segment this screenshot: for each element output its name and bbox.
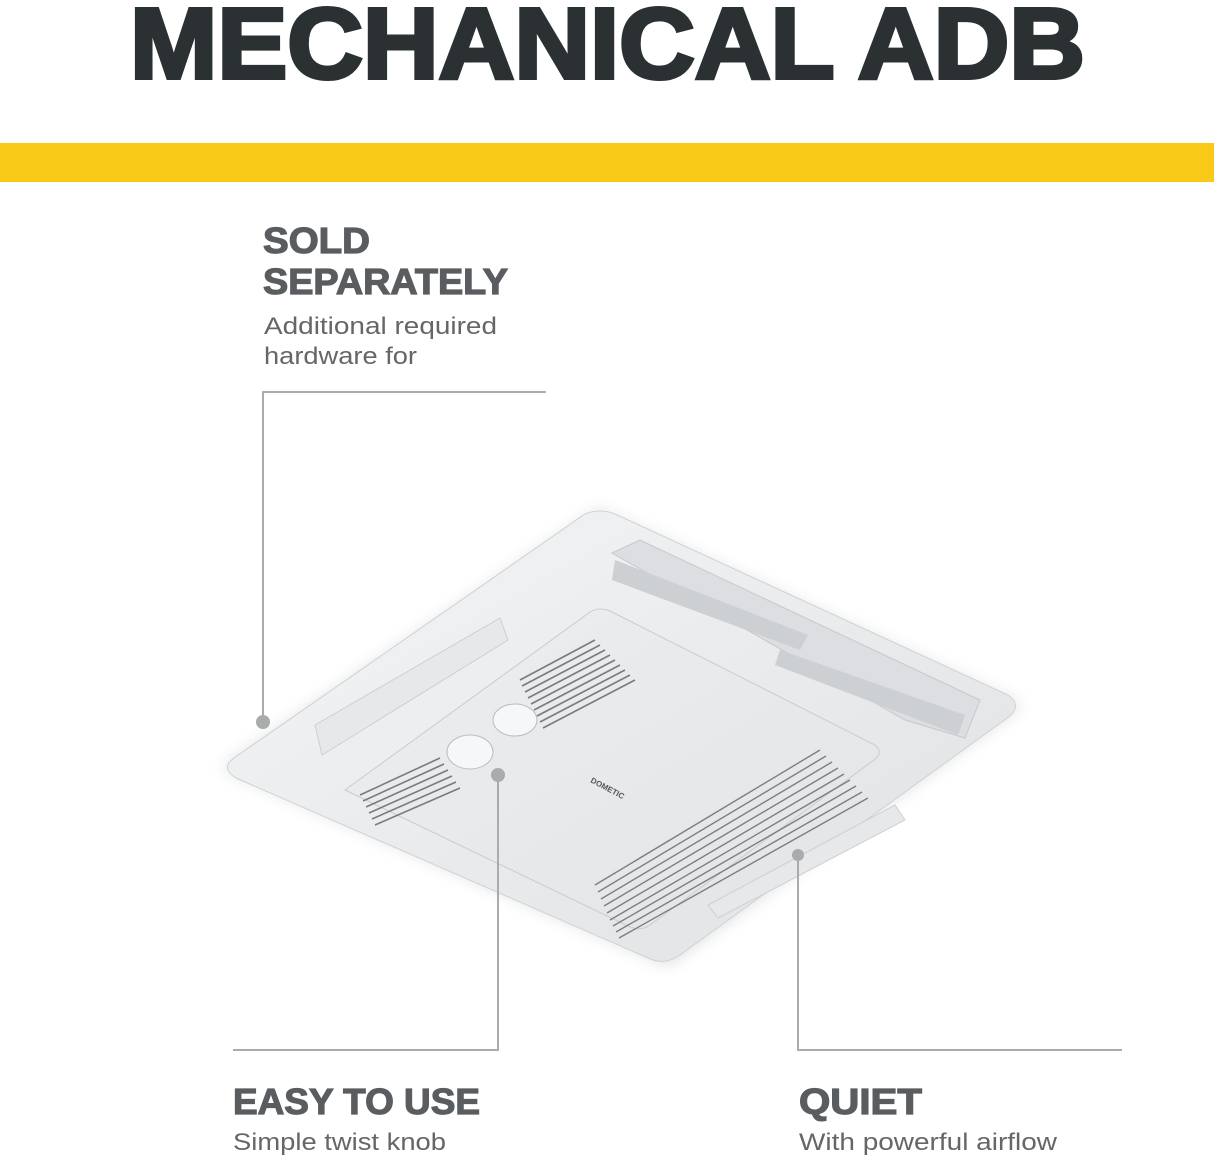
- callout: sold separately: [263, 220, 508, 370]
- callout: sold separately: Additional required: [264, 313, 497, 340]
- inner panel: [345, 609, 879, 929]
- vents: [360, 640, 635, 825]
- dots: [256, 715, 804, 861]
- connector lines: [233, 392, 1122, 1050]
- callout: quiet: [799, 1081, 1058, 1156]
- callout: easy to use: Simple twist knob: [233, 1129, 446, 1156]
- knobs: [493, 704, 537, 736]
- callout: sold separately: hardware for: [264, 343, 417, 370]
- callout: sold separately: SEPARATELY: [263, 261, 508, 302]
- logo: DOMETIC: [589, 776, 626, 801]
- callout: easy to use: EASY TO USE: [233, 1081, 480, 1122]
- callout: quiet: QUIET: [799, 1081, 922, 1122]
- vents bar: [612, 540, 980, 738]
- callout: sold separately: SOLD: [263, 220, 370, 261]
- yellow band: [0, 143, 1214, 182]
- side slots: [315, 618, 508, 755]
- product: ceiling AC unit: [222, 510, 1022, 965]
- callout: quiet: With powerful airflow: [799, 1129, 1058, 1156]
- callout: easy to use: [233, 1081, 480, 1156]
